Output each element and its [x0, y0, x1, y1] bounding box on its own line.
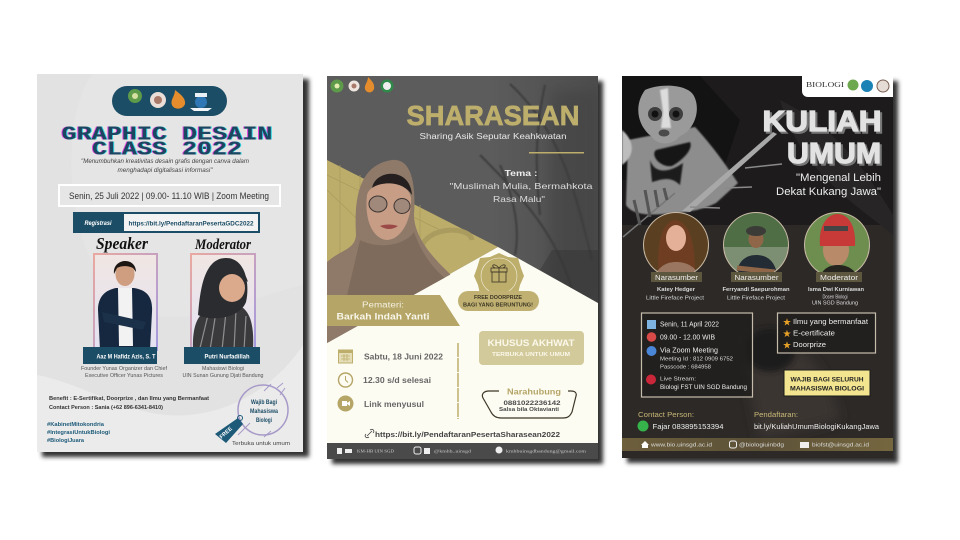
- dark lower triangle: [327, 330, 351, 343]
- speaker portrait: [327, 160, 452, 343]
- event details box: Passcode : 684958: [660, 364, 711, 370]
- footer bar: kmhbuinsgdbandung@gmail.com: [506, 448, 587, 454]
- panel: poster Sharasean: [327, 76, 603, 464]
- footer bar: KM-HB UIN SGD: [357, 448, 395, 454]
- speaker details: Little Fireface Project: [727, 296, 786, 302]
- icon: video: [338, 396, 354, 412]
- event details box: Biologi FST UIN SGD Bandung: [660, 385, 747, 391]
- tagline: [81, 159, 249, 174]
- dashed divider: [457, 343, 459, 419]
- icon: free tag: [215, 416, 243, 443]
- benefits box: [778, 313, 876, 353]
- event date: Sabtu, 18 Juni 2022: [364, 352, 443, 362]
- tagline: "Menumbuhkan kreativitas desain grafis dengan canva dalam: [81, 159, 249, 165]
- speaker photo: Ferryandi Saepurohman: [723, 212, 789, 272]
- speaker details: Dosen Biologi: [822, 294, 848, 300]
- label: narasumber 2: Narasumber: [734, 275, 779, 282]
- registration info: Pendaftaran:: [754, 412, 798, 419]
- speaker portrait frame: [94, 254, 157, 350]
- title: SHARASEAN: [406, 100, 580, 131]
- footer strip: biofst@uinsgd.ac.id: [812, 442, 869, 448]
- pemateri banner: [327, 295, 460, 326]
- logo strip: [802, 76, 893, 97]
- callout: wajib: WAJIB BAGI SELURUH: [790, 376, 864, 384]
- registration info: [754, 412, 879, 431]
- event details box: Meeting Id : 812 0909 6752: [660, 356, 733, 362]
- badge: wajib bagi mahasiswa biologi: Wajib Bagi: [251, 399, 277, 406]
- moderator name: [182, 347, 264, 379]
- badge: wajib bagi mahasiswa biologi: [238, 383, 288, 437]
- event time: 12.30 s/d selesai: [363, 375, 431, 385]
- benefit and contact: Benefit : E-Sertifikat, Doorprize , dan Ilmu yang Bermanfaat: [49, 396, 209, 402]
- footer bar: [327, 443, 598, 459]
- khusus akhwat box: [479, 331, 584, 365]
- icon: clock: [338, 373, 352, 387]
- benefits box: Ilmu yang bermanfaat: [793, 319, 868, 326]
- badge: wajib bagi mahasiswa biologi: Biologi: [256, 417, 272, 424]
- speaker details: Little Fireface Project: [646, 296, 705, 302]
- benefit and contact: [49, 396, 209, 411]
- event details box: 09.00 - 12.00 WIB: [660, 334, 715, 342]
- benefits box: ★: [783, 329, 792, 340]
- theme text: Rasa Malu": [493, 194, 545, 204]
- icon: gift badge: [474, 253, 524, 300]
- hashtags: #KabinetMitokondria: [47, 422, 105, 428]
- title: GRAPHIC DESAIN: [62, 124, 272, 146]
- speaker details: Isma Dwi Kurniawan: [808, 287, 864, 293]
- panel: poster Kuliah Umum: [622, 76, 898, 463]
- title: [762, 106, 884, 172]
- registration bar: Registrasi: [84, 220, 112, 227]
- event details box: Via Zoom Meeting: [660, 348, 718, 354]
- speaker details: Katey Hedger: [657, 287, 695, 293]
- footer strip: [622, 438, 893, 451]
- registration bar: [73, 212, 260, 233]
- doorprize pill: BAGI YANG BERUNTUNG!: [463, 302, 533, 308]
- event link: Link menyusul: [364, 399, 424, 409]
- speaker details: Ferryandi Saepurohman: [722, 287, 790, 293]
- theme text: Tema :: [504, 168, 538, 178]
- speaker name: [81, 347, 168, 379]
- khusus akhwat box: TERBUKA UNTUK UMUM: [492, 352, 570, 358]
- gold patterned triangle: [327, 160, 498, 274]
- title: UMUM: [787, 138, 881, 170]
- loris illustration: [622, 86, 782, 237]
- heading: speaker: Speaker: [96, 234, 148, 253]
- icon: free tag: FREE: [219, 426, 234, 440]
- footer strip: @biologiuinbdg: [739, 442, 784, 448]
- date box: Senin, 25 Juli 2022 | 09.00- 11.10 WIB | Zoom Meeting: [69, 191, 269, 201]
- hashtags: #BiologiJuara: [47, 438, 85, 444]
- title: CLASS 2022: [91, 138, 241, 160]
- theme text: "Muslimah Mulia, Bermahkota: [450, 181, 593, 191]
- label: narasumber 1: [651, 272, 702, 282]
- title: CLASS 2022: [92, 138, 242, 160]
- label: narasumber 1: Narasumber: [655, 275, 699, 282]
- subtitle: Sharing Asik Seputar Keahkwatan: [420, 132, 566, 141]
- theme text: [450, 168, 593, 204]
- date box: [59, 185, 280, 206]
- icon: calendar: [338, 350, 352, 363]
- speaker name: Executive Officer Yunas Pictures: [85, 373, 164, 379]
- title: GRAPHIC DESAIN: [60, 124, 272, 146]
- subtitle: "Mengenal Lebih: [796, 172, 881, 184]
- gold rule: [529, 152, 584, 154]
- callout: wajib: MAHASISWA BIOLOGI: [790, 386, 864, 392]
- subtitle: [776, 172, 881, 198]
- doorprize pill: [458, 291, 539, 311]
- speaker details: [646, 287, 864, 306]
- speaker details: UIN SGD Bandung: [812, 300, 858, 306]
- title: CLASS 2022: [93, 138, 243, 160]
- speaker photo: Katey Hedger: [643, 212, 709, 272]
- house shape: [327, 247, 598, 443]
- title: KULIAH: [762, 106, 882, 138]
- moderator name: UIN Sunan Gunung Djati Bandung: [182, 373, 264, 379]
- khusus akhwat box: KHUSUS AKHWAT: [488, 338, 575, 349]
- pemateri banner: Pemateri:: [362, 300, 404, 310]
- tagline: menghadapi digitalisasi informasi": [118, 168, 213, 174]
- contact person: [638, 412, 724, 432]
- label: moderator: [816, 272, 862, 282]
- hashtags: [47, 422, 110, 444]
- moderator name: Putri Nurfadillah: [204, 354, 250, 360]
- speaker photo: Isma Dwi Kurniawan: [804, 212, 870, 272]
- doorprize pill: FREE DOORPRIZE: [474, 295, 523, 301]
- moderator portrait frame: [191, 254, 255, 350]
- event details box: Live Stream:: [660, 376, 697, 382]
- pemateri banner: Barkah Indah Yanti: [336, 312, 430, 322]
- subtitle: Dekat Kukang Jawa": [776, 186, 881, 198]
- moderator name: Mahasiswi Biologi: [202, 366, 244, 372]
- footer strip: www.bio.uinsgd.ac.id: [650, 442, 712, 448]
- footer bar: @kmhb_uinsgd: [434, 448, 472, 454]
- panel: poster Graphic Desain Class 2022: [37, 74, 309, 457]
- callout: wajib: [784, 370, 870, 396]
- benefits box: Doorprize: [793, 342, 826, 349]
- title: KULIAH: [764, 108, 884, 140]
- registration link: https://bit.ly/PendaftaranPesertaSharasean2022: [375, 430, 560, 439]
- title: GRAPHIC DESAIN: [62, 124, 274, 146]
- title: [60, 124, 274, 160]
- contact person: Contact Person:: [638, 412, 694, 419]
- benefit and contact: Contact Person : Sania (+62 896-6341-8410): [49, 405, 163, 411]
- contact bracket: Narahubung: [507, 386, 561, 396]
- label: narasumber 2: [731, 272, 782, 282]
- benefits box: ★: [783, 318, 792, 328]
- speaker name: Aaz M Hafidz Azis, S. T: [96, 354, 156, 360]
- contact person: Fajar 083895153394: [652, 422, 724, 431]
- title: UMUM: [789, 140, 883, 172]
- note: open to public: Terbuka untuk umum: [232, 441, 290, 447]
- logos row: [330, 77, 394, 92]
- logo strip: BIOLOGI: [806, 80, 845, 89]
- badge: wajib bagi mahasiswa biologi: Mahasiswa: [250, 408, 278, 415]
- event details box: Senin, 11 April 2022: [660, 322, 719, 328]
- logo pill: [112, 86, 227, 116]
- registration info: bit.ly/KuliahUmumBiologiKukangJawa: [754, 424, 879, 431]
- benefits box: E-certificate: [793, 330, 835, 338]
- contact bracket: Salsa bila Oktavianti: [499, 407, 560, 413]
- heading: moderator: Moderator: [194, 237, 251, 253]
- label: moderator: Moderator: [820, 275, 859, 282]
- benefits box: ★: [783, 340, 792, 352]
- contact bracket: 0881022236142: [504, 400, 561, 407]
- registration bar: https://bit.ly/PendaftaranPesertaGDC2022: [128, 220, 254, 228]
- contact bracket: [482, 386, 576, 418]
- speaker name: Founder Yunas Organizer dan Chief: [81, 366, 168, 372]
- hashtags: #IntegrasiUntukBiologi: [47, 430, 110, 436]
- event details box: [642, 313, 752, 397]
